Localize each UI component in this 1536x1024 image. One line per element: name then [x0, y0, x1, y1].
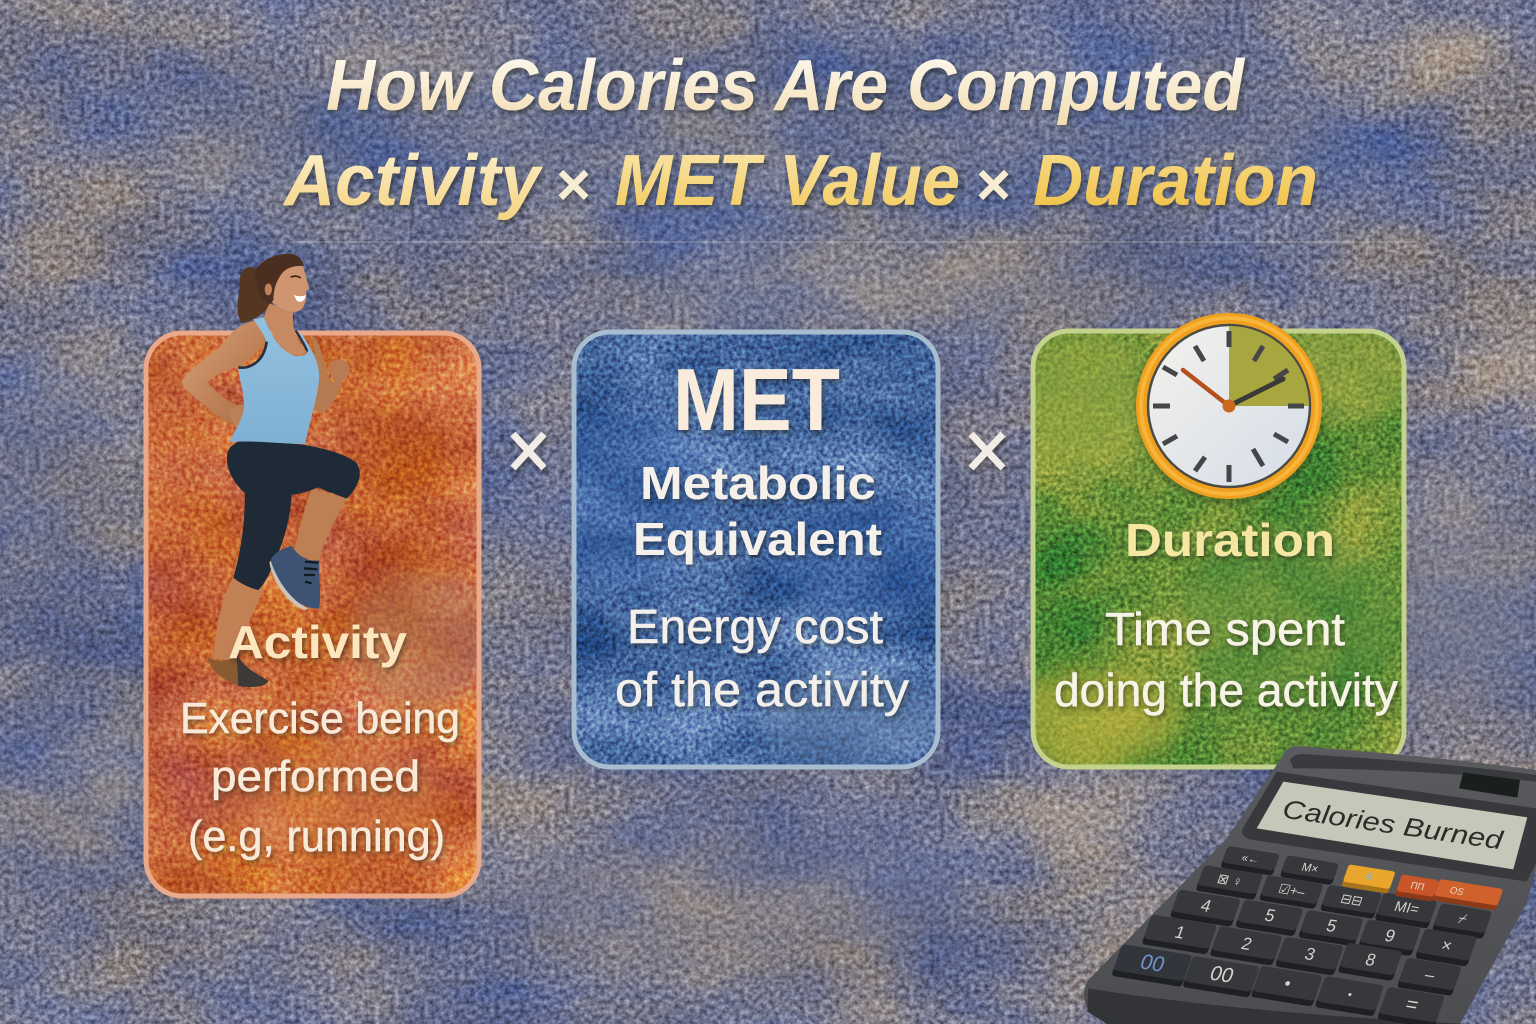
keypad: MI=	[1392, 899, 1421, 918]
keypad: –	[1422, 964, 1439, 985]
neck	[264, 303, 307, 356]
tank top	[229, 317, 319, 444]
keypad: 3	[1302, 943, 1318, 964]
MET description: Energy cost	[627, 601, 883, 654]
duration description	[1054, 603, 1398, 716]
clock hands	[1183, 370, 1283, 412]
far hand	[329, 359, 349, 383]
activity description	[180, 694, 460, 861]
keypad: 5	[1324, 915, 1340, 936]
head	[238, 254, 309, 323]
back capri	[233, 492, 292, 590]
title line 2: formula: MET Value	[615, 141, 960, 221]
keypad: =	[1402, 993, 1422, 1017]
far arm	[312, 335, 343, 413]
MET description	[615, 601, 909, 717]
keypad: 00	[1207, 962, 1237, 988]
keypad: 8	[1363, 949, 1379, 970]
solar panel	[1459, 772, 1520, 798]
calculator	[1084, 746, 1536, 1024]
keypad: ⊟⊟	[1339, 891, 1365, 909]
thigh capri	[227, 439, 360, 499]
keypad: ⌿	[1456, 910, 1470, 927]
keypad: 1	[1172, 922, 1188, 943]
keypad: «←	[1240, 851, 1262, 867]
activity description: Exercise being	[180, 694, 460, 743]
keypad: 5	[1262, 905, 1278, 926]
heading: activity: Activity	[228, 616, 407, 668]
near hand	[229, 404, 259, 427]
back leg	[213, 577, 264, 661]
back shoe	[207, 655, 268, 687]
calculator body	[1084, 746, 1536, 1024]
keypad: 00	[1137, 950, 1168, 977]
multiply sign 2	[971, 434, 1003, 468]
MET full name: Equivalent	[633, 513, 882, 565]
title line 2: formula	[282, 141, 1318, 221]
panel: duration	[1030, 328, 1408, 774]
display frame	[1242, 772, 1536, 882]
multiply sign 1	[513, 434, 544, 468]
display text: Calories Burned	[1281, 794, 1506, 856]
MET description: of the activity	[615, 664, 909, 717]
front shoe	[269, 546, 320, 610]
title	[282, 46, 1318, 221]
keypad: ×	[1439, 935, 1455, 956]
heading: MET: MET	[673, 350, 840, 449]
keypad: ⊠ ♀	[1215, 870, 1245, 890]
keypad: ☑+–	[1276, 881, 1308, 900]
heading: duration: Duration	[1125, 514, 1335, 566]
keypad: 9	[1382, 925, 1398, 946]
runner illustration	[182, 254, 360, 687]
title line 2: formula: Activity	[282, 141, 544, 221]
keypad: ※	[1363, 872, 1375, 884]
activity description: (e.g, running)	[188, 812, 445, 861]
MET full name: Metabolic	[640, 457, 876, 509]
panel: MET	[572, 330, 942, 774]
display	[1257, 782, 1527, 869]
icon: clock	[1135, 313, 1323, 504]
keypad: ПП	[1409, 881, 1426, 893]
front shin	[293, 488, 347, 561]
keypad: M×	[1300, 861, 1320, 876]
panel: activity	[146, 254, 490, 896]
title line 2: formula: ×	[556, 151, 591, 218]
duration description: doing the activity	[1054, 664, 1398, 716]
keypad: •	[1281, 973, 1294, 993]
duration description: Time spent	[1105, 603, 1345, 655]
keypad: 2	[1239, 933, 1255, 954]
near arm	[182, 320, 268, 425]
keypad: •	[1346, 988, 1354, 1002]
keypad: ОЅ	[1448, 885, 1465, 898]
title line 1: How Calories Are Computed	[326, 46, 1246, 126]
keypad	[1111, 846, 1503, 1024]
MET full name	[633, 457, 882, 565]
activity description: performed	[211, 752, 420, 801]
keypad: 4	[1198, 895, 1215, 916]
title line 2: formula: ×	[976, 151, 1011, 218]
title line 2: formula: Duration	[1033, 141, 1318, 221]
